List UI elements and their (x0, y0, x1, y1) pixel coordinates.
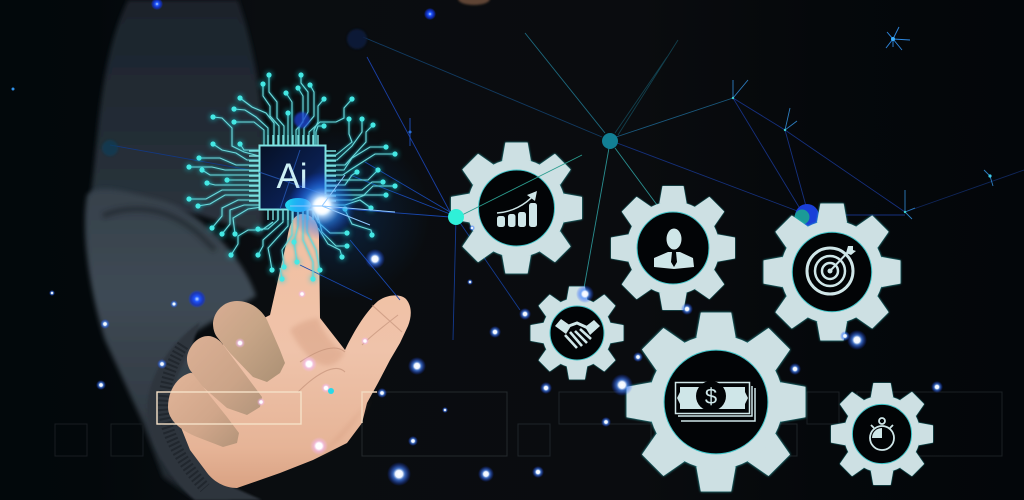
line through gear (458, 155, 582, 217)
icon: businessman (654, 228, 694, 269)
gear: target (764, 204, 900, 340)
sleeve cuff (147, 322, 262, 500)
hand (168, 214, 411, 488)
halo behind circuit (250, 130, 430, 300)
icon: target with arrow (807, 246, 856, 294)
gear: handshake (530, 286, 624, 380)
forearm sleeve (85, 189, 256, 500)
gear: growth chart (451, 142, 582, 274)
palm shading (290, 318, 370, 455)
network nodes (102, 29, 819, 228)
dollar sign: $ (705, 384, 717, 409)
bottom traces (258, 209, 278, 229)
icon: banknote stack (676, 381, 755, 421)
ring finger (187, 336, 262, 415)
right traces (326, 119, 352, 155)
middle finger (213, 301, 285, 382)
chip pins (249, 135, 336, 220)
top traces (269, 75, 284, 145)
icon: growth chart (497, 191, 537, 227)
icon: stopwatch (870, 418, 894, 450)
index finger and palm (178, 214, 411, 488)
upper sleeve (90, 0, 264, 235)
circuit end dots (186, 72, 398, 282)
palm creases (298, 305, 402, 392)
gear: money (626, 312, 806, 492)
chin hint at top (458, 0, 490, 5)
blue node on chip top (294, 112, 310, 128)
network lines (110, 33, 1024, 340)
gear: person (611, 186, 735, 310)
fingertip cyan blob (285, 198, 311, 212)
hologram rectangles (55, 392, 1002, 456)
chip lines (259, 150, 326, 209)
star flares (12, 27, 993, 219)
chip label: Ai (276, 157, 308, 196)
circuit traces (189, 75, 395, 279)
touch flare (288, 172, 395, 240)
gear: stopwatch (831, 383, 933, 485)
sleeve fold (103, 209, 215, 250)
cyan node (448, 209, 464, 225)
AI chip (249, 135, 336, 220)
icon: handshake (555, 319, 600, 348)
pinky finger (168, 373, 239, 447)
left traces (213, 117, 259, 156)
